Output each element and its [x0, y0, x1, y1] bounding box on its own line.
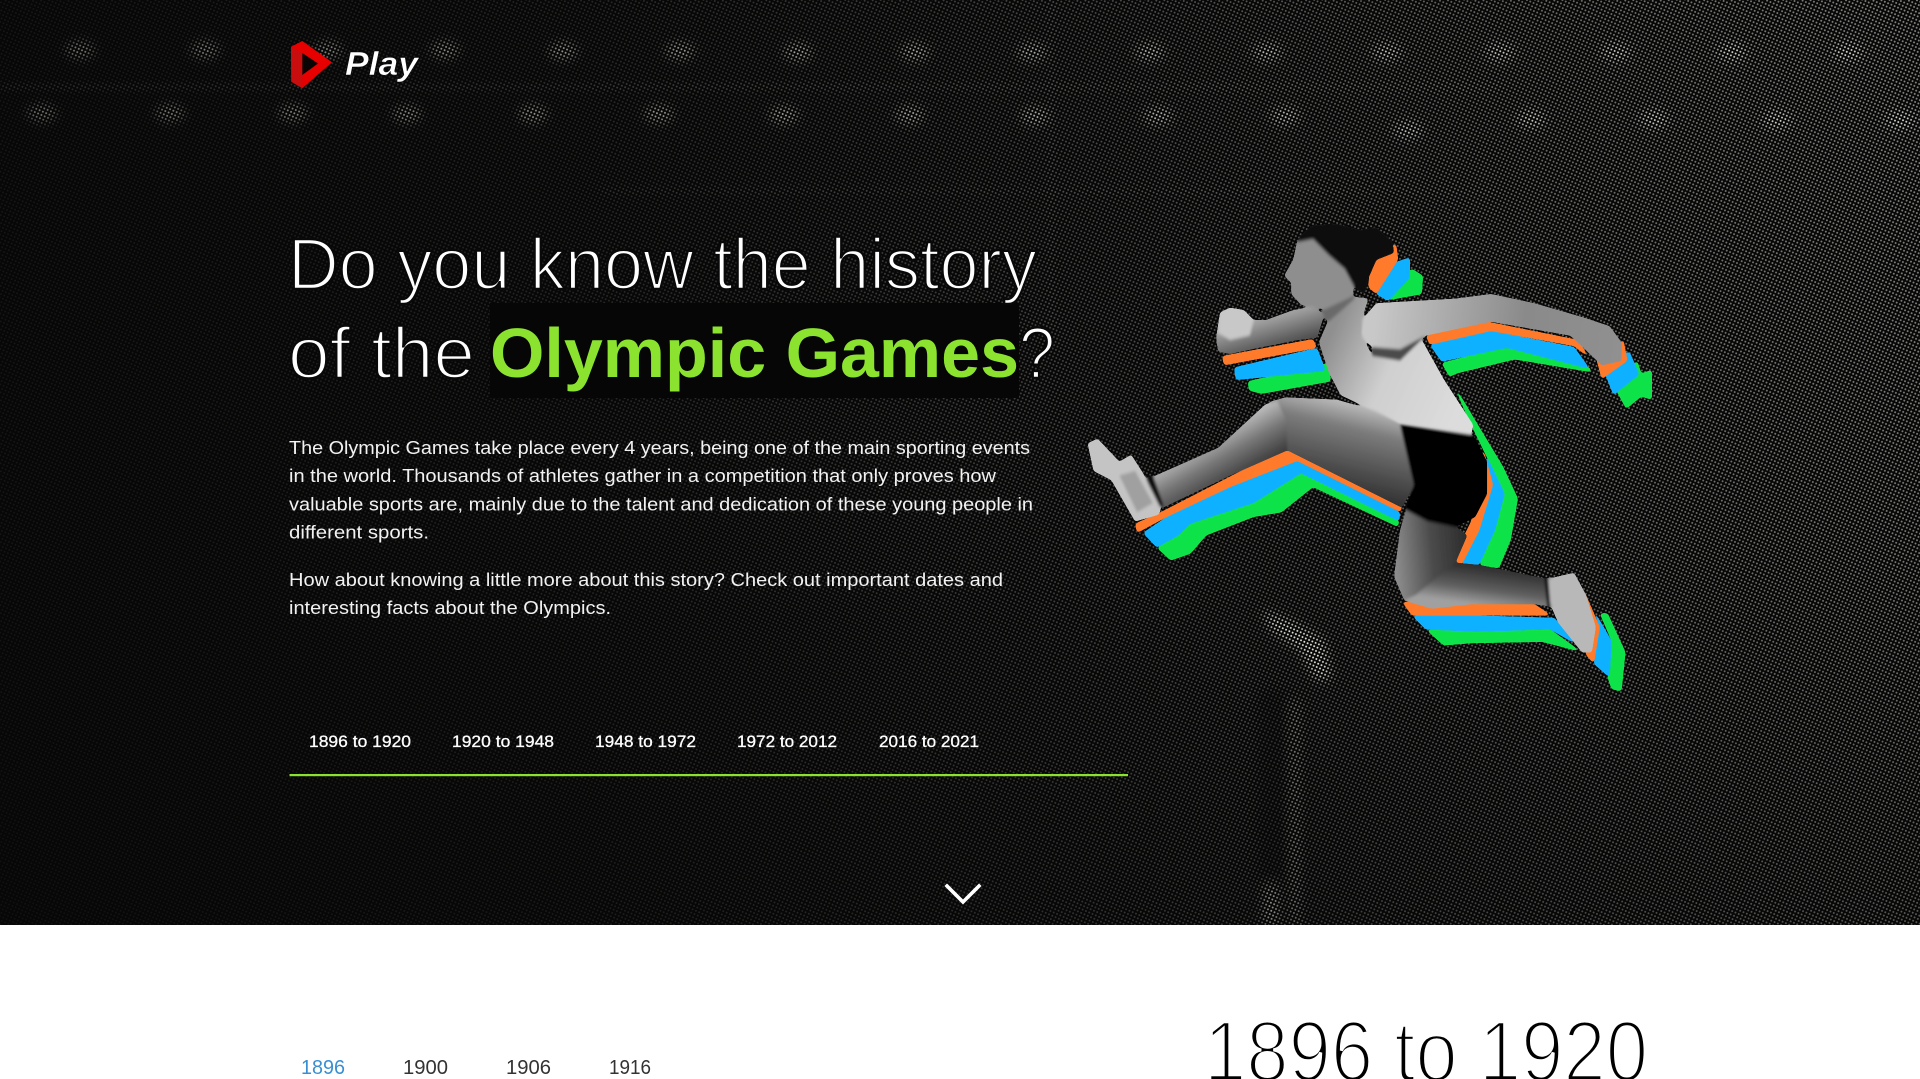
hair	[1297, 224, 1394, 294]
title	[288, 225, 1055, 394]
intro paragraph: in the world. Thousands of athletes gather in a competition that only proves how	[289, 465, 997, 486]
year tabs	[301, 1057, 651, 1079]
period navigation: 2016 to 2021	[879, 732, 979, 751]
period navigation: 1948 to 1972	[595, 732, 696, 751]
year tabs: 1916	[609, 1057, 651, 1079]
front hand	[1218, 308, 1254, 340]
underarm	[1372, 335, 1426, 361]
colour stripes	[1135, 244, 1652, 691]
logo wordmark: Play	[345, 45, 420, 82]
neck	[1321, 294, 1355, 322]
period navigation: 1896 to 1920	[309, 732, 411, 751]
year tabs: 1900	[403, 1057, 448, 1079]
icon: scroll chevron	[947, 886, 979, 902]
front sock	[1146, 476, 1164, 509]
intro paragraph: different sports.	[289, 522, 429, 542]
period navigation	[309, 732, 979, 751]
period navigation: 1920 to 1948	[452, 732, 554, 751]
period navigation: 1972 to 2012	[737, 732, 837, 751]
navigation underline	[290, 774, 1128, 776]
thigh	[1270, 397, 1414, 508]
front arm	[1216, 307, 1324, 354]
front shoe	[1088, 439, 1161, 521]
year tabs: 1896	[301, 1057, 345, 1079]
title: ?	[1019, 314, 1055, 394]
title: Olympic Games	[490, 314, 1019, 392]
back shoe	[1548, 573, 1596, 652]
back arm	[1362, 294, 1621, 365]
face	[1284, 239, 1355, 309]
icon: play triangle	[291, 41, 332, 88]
athlete figure	[1088, 224, 1621, 652]
title: Do you know the history	[288, 225, 1037, 305]
second paragraph: interesting facts about the Olympics.	[289, 597, 611, 618]
athlete illustration	[1088, 224, 1652, 691]
back leg	[1394, 510, 1467, 599]
tank top	[1319, 296, 1473, 434]
second paragraph: How about knowing a little more about this story? Check out important dates and	[289, 569, 1003, 590]
front shin	[1151, 401, 1287, 508]
intro paragraph: valuable sports are, mainly due to the talent and dedication of these young people in	[289, 494, 1033, 514]
shorts	[1400, 425, 1487, 527]
year tabs: 1906	[506, 1057, 551, 1079]
highlight box behind Olympic Games	[490, 303, 1019, 398]
intro paragraph: The Olympic Games take place every 4 years, being one of the main sporting events	[289, 437, 1030, 458]
title: of the	[288, 314, 475, 394]
back sock	[1544, 577, 1554, 608]
logo	[291, 41, 420, 88]
back calf	[1404, 563, 1550, 609]
intro paragraph	[289, 437, 1033, 542]
second paragraph	[289, 569, 1003, 618]
